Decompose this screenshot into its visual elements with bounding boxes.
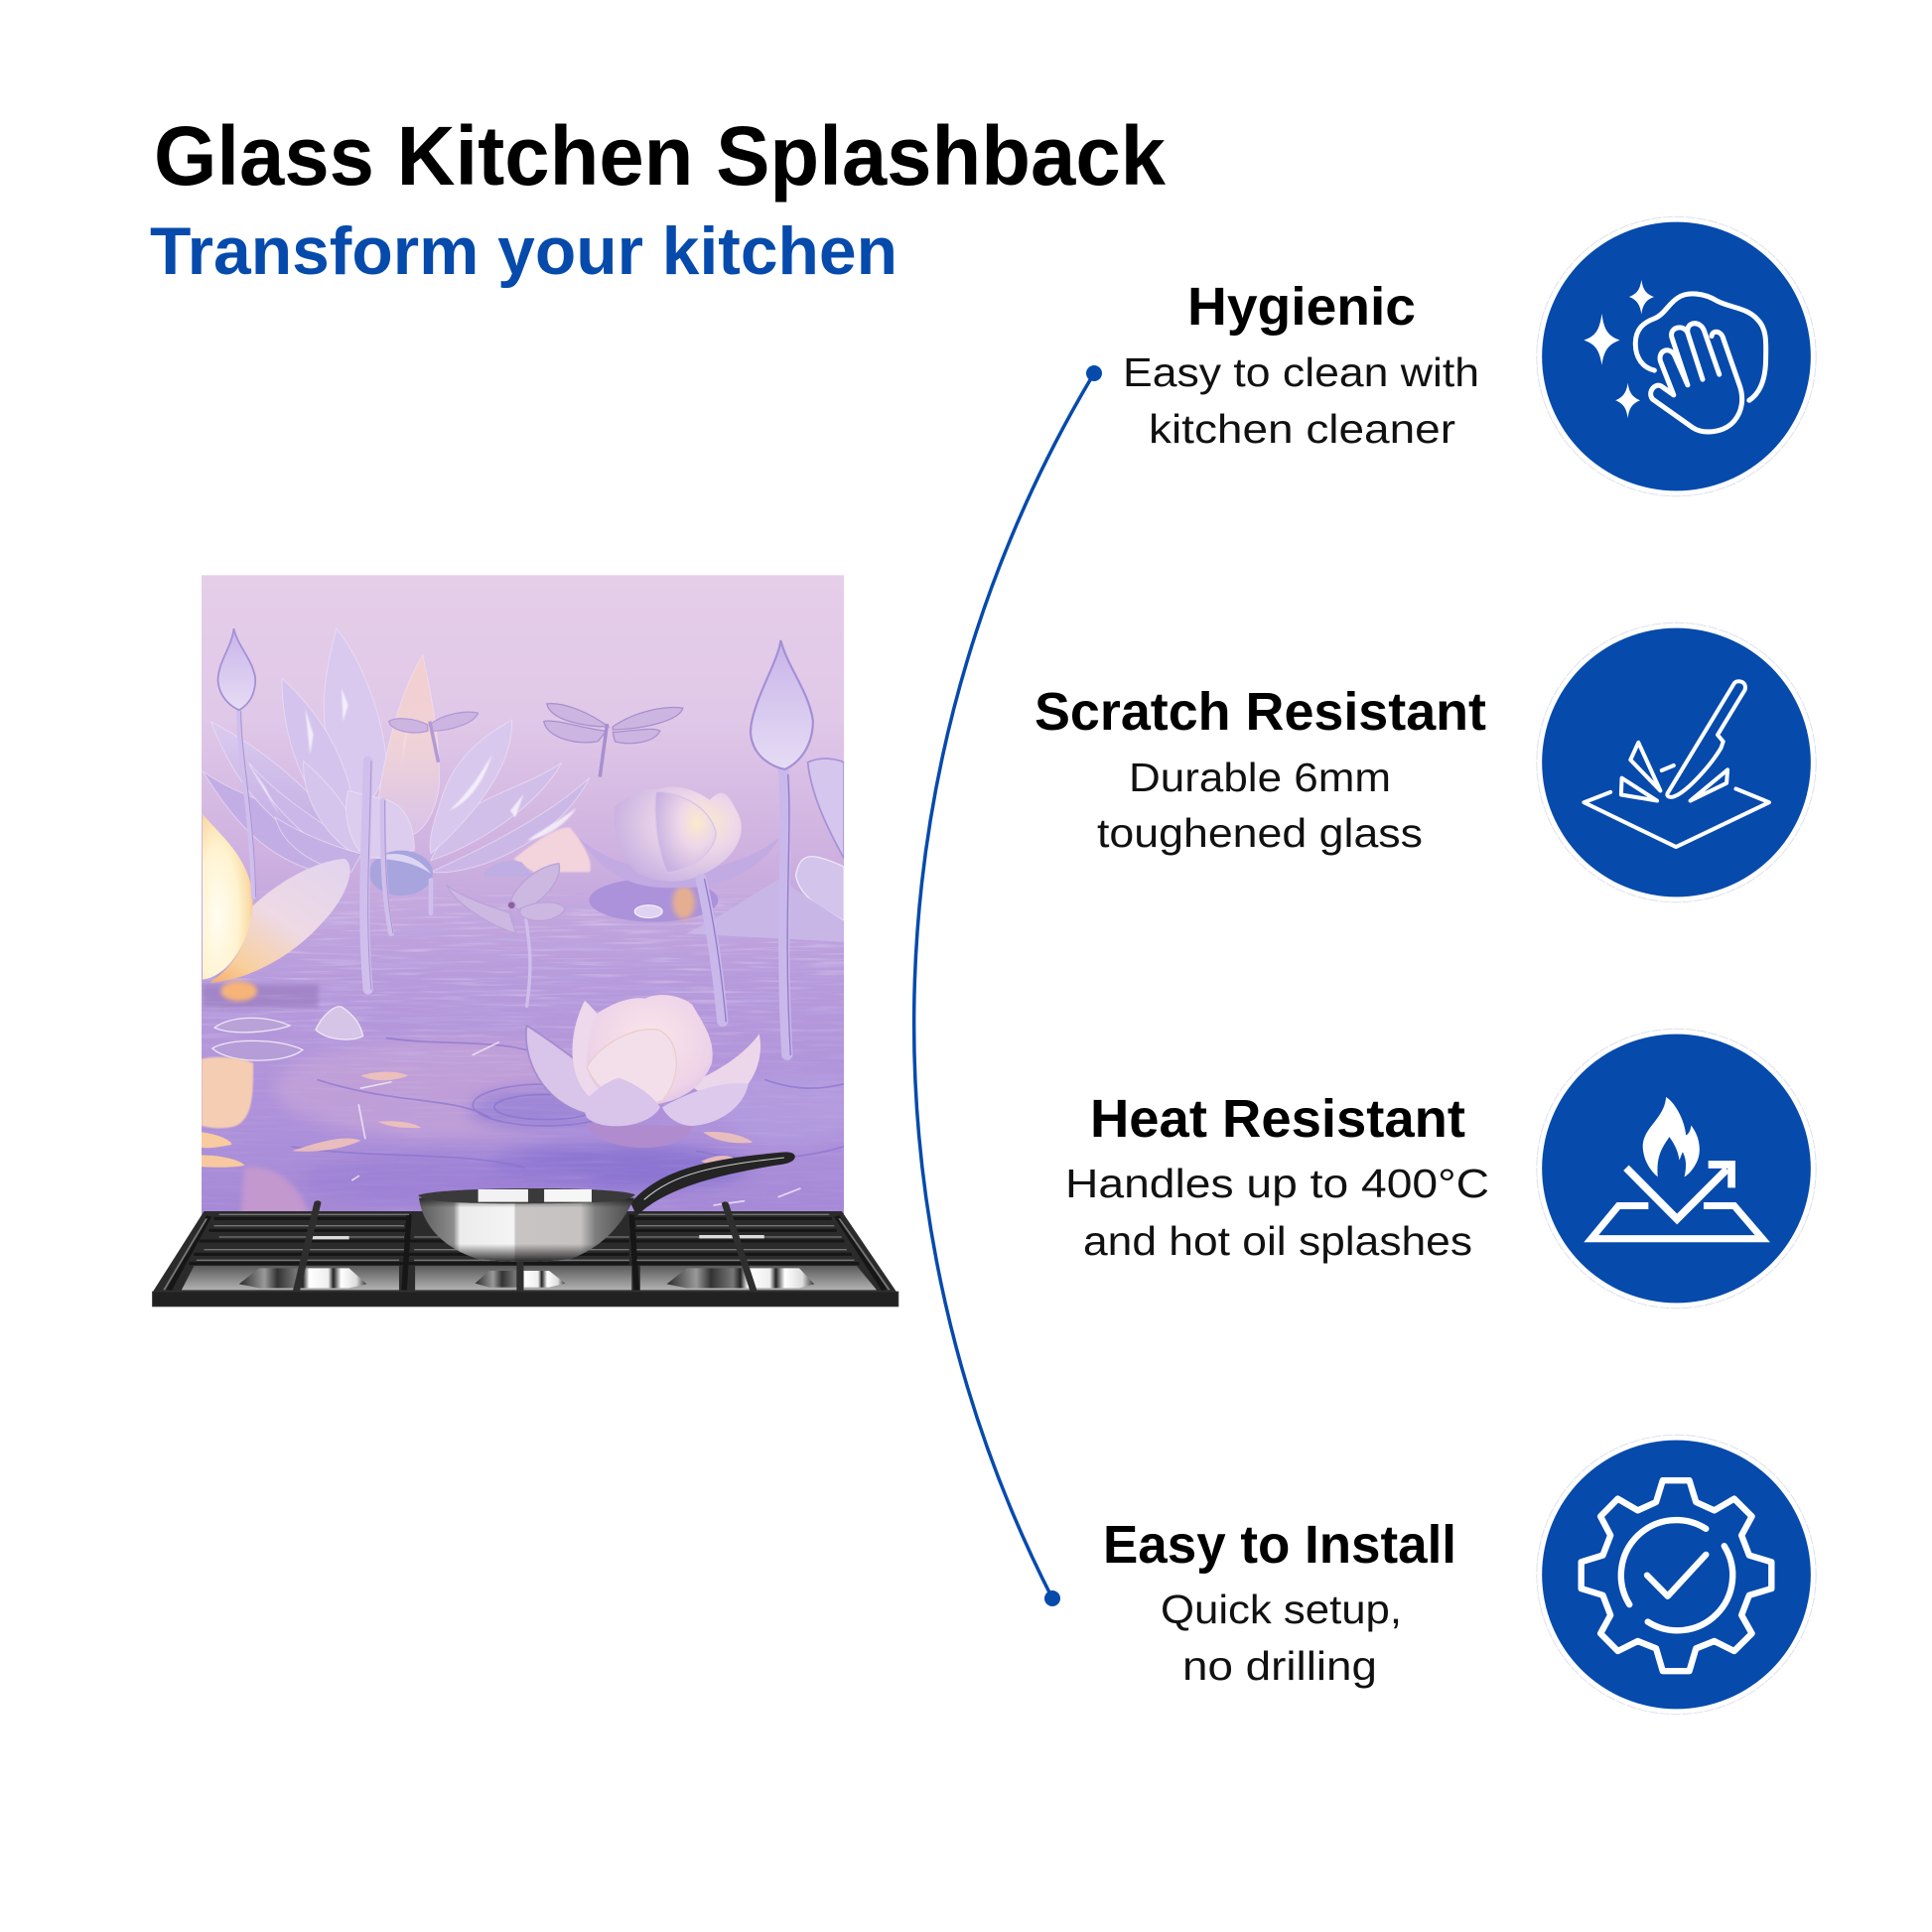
vertical grate crossbars (297, 1203, 754, 1290)
burner wells (182, 1266, 877, 1290)
description (1161, 1587, 1402, 1689)
heading: Scratch Resistant (1035, 682, 1486, 742)
product image: splashback artwork above hob (153, 575, 898, 1307)
title: Glass Kitchen Splashback (154, 109, 1166, 203)
icon: gear with check mark (1537, 1435, 1816, 1715)
subtitle: Transform your kitchen (150, 213, 897, 289)
large bud right (751, 640, 813, 769)
dragonfly right (544, 704, 683, 777)
foreground stems (701, 770, 790, 1054)
icon: knife scratching glass (1537, 622, 1816, 902)
description: Durable 6mm (1129, 755, 1391, 800)
description: kitchen cleaner (1149, 406, 1455, 452)
hob with pan (153, 1152, 898, 1307)
description: toughened glass (1097, 810, 1423, 856)
ice pad right (686, 880, 844, 942)
right side cut-off petals (796, 759, 844, 921)
heading: Easy to Install (1103, 1515, 1456, 1575)
feature: easy to install (1103, 1515, 1456, 1689)
feature: scratch resistant (1035, 682, 1486, 856)
icon: hand wiping with sparkles (1537, 216, 1816, 496)
burners (239, 1235, 814, 1288)
glass stems (239, 712, 530, 1006)
spiky glass petals (203, 628, 590, 873)
pan handle (630, 1152, 795, 1216)
description (1123, 349, 1479, 452)
feature: heat resistant (1065, 1089, 1489, 1264)
description: and hot oil splashes (1083, 1218, 1472, 1264)
dragonfly on water (447, 864, 565, 933)
water shadow zones (275, 1038, 861, 1205)
dragonfly middle (389, 712, 478, 762)
description: Easy to clean with (1123, 349, 1479, 395)
right lotus (578, 786, 779, 922)
small bud left (217, 628, 255, 710)
heading: Heat Resistant (1090, 1089, 1465, 1149)
description (1097, 755, 1423, 856)
pan body (419, 1198, 634, 1262)
frying pan (418, 1152, 795, 1262)
description: no drilling (1182, 1643, 1377, 1689)
description: Quick setup, (1161, 1587, 1402, 1632)
water ripple texture (202, 895, 844, 1178)
grate bars (169, 1214, 885, 1290)
glass lotus, left lily and stems (203, 628, 591, 1008)
heading: Hygienic (1187, 277, 1416, 337)
gas hob body (153, 1203, 898, 1307)
front lotus (526, 995, 760, 1148)
description (1065, 1161, 1489, 1264)
rocks (212, 1007, 363, 1060)
ripple rings (292, 1038, 843, 1205)
icon: flame over deflecting arrow (1537, 1029, 1816, 1309)
connector curve with end dots (914, 365, 1102, 1606)
glass sphere (369, 851, 433, 896)
left orange reflections (202, 1057, 312, 1221)
left glowing lily (203, 814, 350, 1008)
feature: hygienic (1123, 277, 1479, 452)
pan rim (418, 1188, 635, 1203)
front edge (153, 1292, 898, 1307)
petal highlights (249, 688, 577, 841)
distant glow and mound (513, 827, 591, 872)
description: Handles up to 400°C (1065, 1161, 1489, 1206)
peach glints on water (292, 1072, 753, 1165)
splashback artwork: glass water lilies on lilac water (202, 575, 861, 1227)
